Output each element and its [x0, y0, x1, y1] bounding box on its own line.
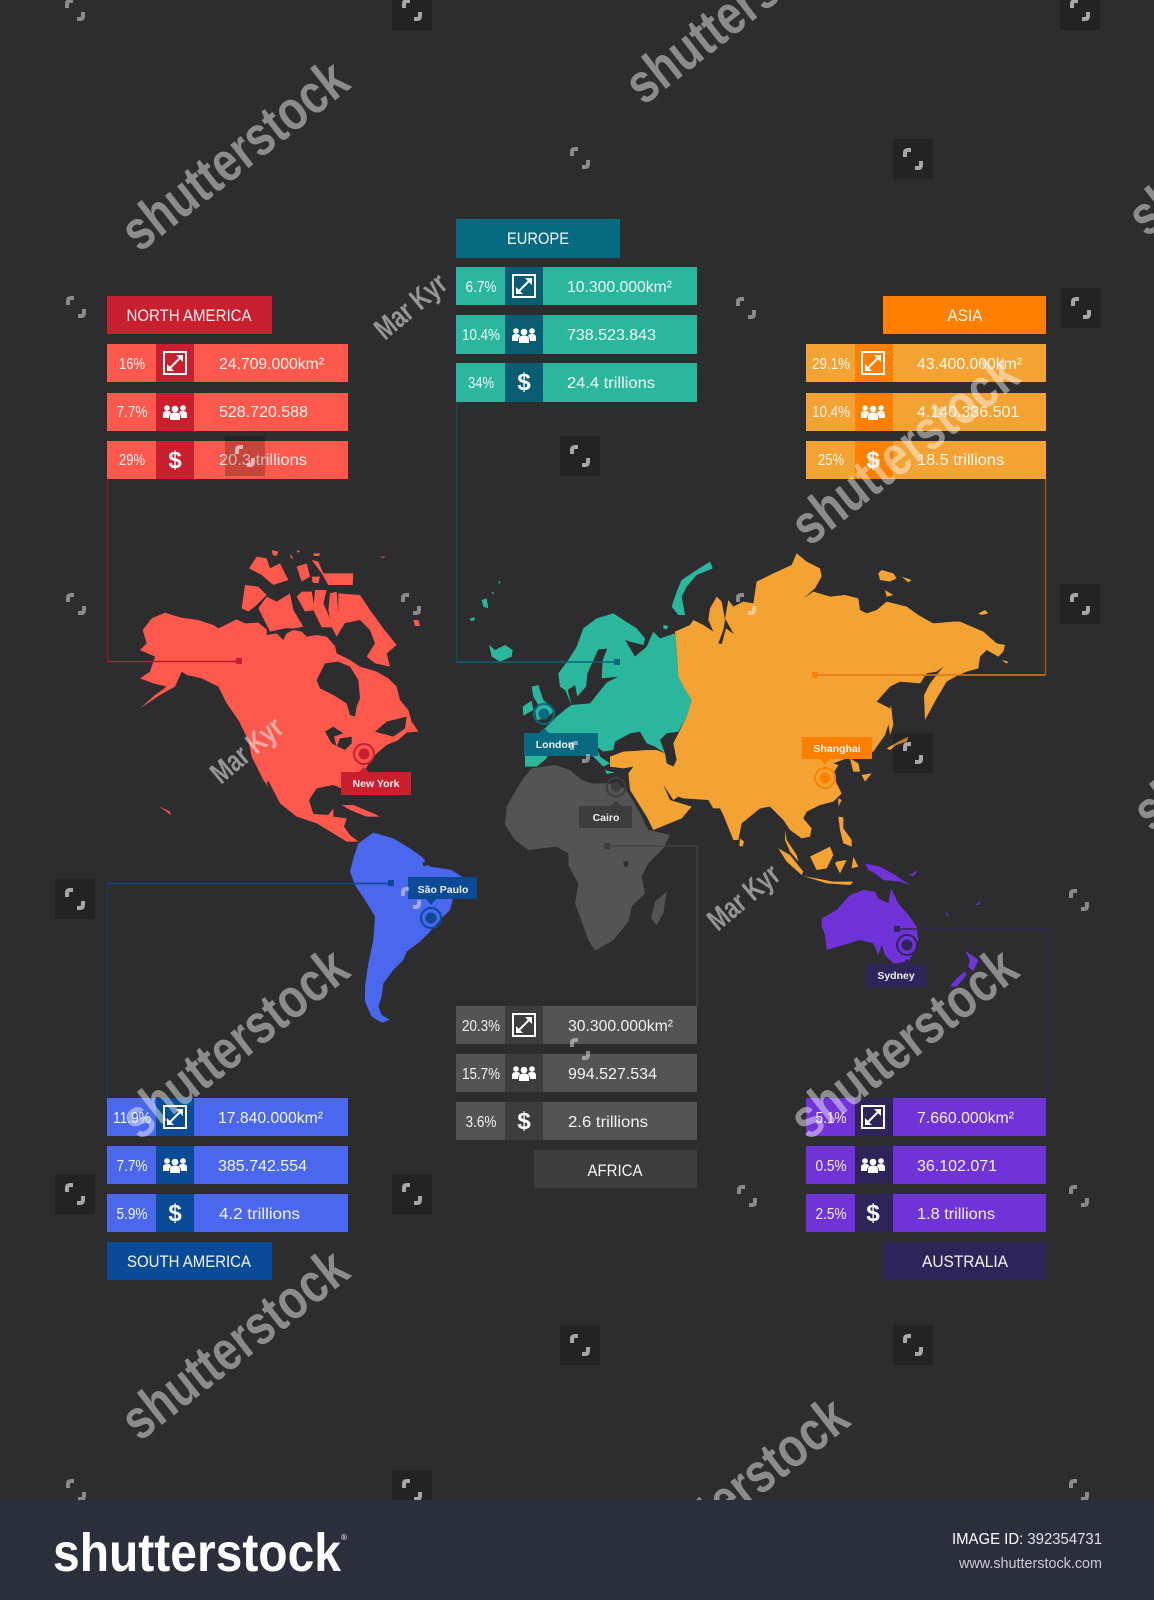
city pin: London: London	[536, 739, 574, 751]
city pin: New York	[341, 744, 411, 795]
row: area	[456, 267, 697, 305]
row: gdp: $	[866, 1200, 880, 1227]
row: area	[107, 344, 348, 382]
row: area: 43.400.000km²	[917, 356, 1023, 373]
row: gdp: 5.9%	[116, 1206, 148, 1223]
europe	[470, 562, 713, 774]
heading: asia: ASIA	[948, 306, 983, 325]
row: gdp: 25%	[818, 452, 844, 469]
row: area: 6.7%	[466, 279, 496, 296]
row: population	[456, 315, 697, 354]
row: population: 4.140.336.501	[917, 404, 1019, 421]
node: north america	[236, 658, 242, 664]
connector lines	[108, 402, 1046, 1098]
panel: africa	[456, 1006, 697, 1188]
row: population: 10.4%	[462, 327, 500, 344]
node: asia	[812, 672, 818, 678]
row: gdp: $	[168, 1200, 182, 1227]
row: area	[107, 1098, 348, 1136]
footer image id: IMAGE ID: 392354731	[952, 1531, 1102, 1548]
panel: north america	[107, 296, 348, 479]
asia	[610, 553, 1008, 840]
city pin: London	[524, 704, 598, 756]
watermark: author name	[204, 267, 787, 937]
row: gdp: 34%	[468, 375, 494, 392]
row: population: 738.523.843	[567, 327, 656, 344]
north america	[140, 550, 420, 842]
watermark: author name: Mar Kyr	[204, 711, 290, 790]
footer url: www.shutterstock.com	[958, 1555, 1102, 1572]
row: gdp: $	[866, 447, 880, 474]
row: area: 29.1%	[812, 356, 850, 373]
row: gdp: 29%	[119, 452, 145, 469]
watermark: stock brand text: shutterstock	[777, 934, 1029, 1151]
row: gdp: 24.4 trillions	[567, 375, 655, 392]
heading: europe	[456, 219, 620, 258]
row: population: 36.102.071	[917, 1158, 997, 1175]
row: population: 7.7%	[116, 404, 148, 421]
row: area	[456, 1006, 697, 1044]
city pin: Sydney	[866, 935, 926, 987]
row: gdp: $	[517, 1108, 531, 1135]
heading: australia: AUSTRALIA	[922, 1252, 1009, 1271]
row: population	[107, 1146, 348, 1184]
heading: africa: AFRICA	[588, 1161, 643, 1180]
panel: europe	[456, 219, 697, 402]
heading: south america: SOUTH AMERICA	[127, 1252, 252, 1271]
node: africa	[604, 843, 610, 849]
row: population: 0.5%	[816, 1158, 846, 1175]
row: gdp: 20.3 trillions	[219, 452, 307, 469]
footer bar	[0, 1500, 1154, 1600]
world map	[140, 550, 1008, 1023]
row: population	[806, 1146, 1046, 1184]
row: gdp: 2.6 trillions	[568, 1114, 648, 1131]
row: gdp: 18.5 trillions	[917, 452, 1004, 469]
heading: europe: EUROPE	[507, 229, 569, 248]
panel: south america	[107, 1098, 348, 1280]
row: area: 20.3%	[462, 1018, 500, 1035]
heading: australia	[883, 1242, 1046, 1280]
row: area: 16%	[119, 356, 145, 373]
row: gdp	[456, 1102, 697, 1140]
row: area: 30.300.000km²	[568, 1018, 674, 1035]
row: gdp	[456, 363, 697, 402]
row: area: 24.709.000km²	[219, 356, 325, 373]
southeast asia islands	[739, 798, 858, 885]
row: area: 5.1%	[816, 1110, 846, 1127]
row: gdp: 3.6%	[466, 1114, 496, 1131]
city pin: New York: New York	[353, 778, 400, 790]
footer logo: shutterstock	[53, 1523, 342, 1583]
city pin: São Paulo: São Paulo	[418, 884, 468, 896]
row: gdp: 1.8 trillions	[917, 1206, 995, 1223]
node: australia	[894, 926, 900, 932]
row: gdp	[107, 441, 348, 479]
row: area: 11.9%	[113, 1110, 151, 1127]
node: europe	[614, 659, 620, 665]
row: area: 17.840.000km²	[218, 1110, 324, 1127]
row: population: 528.720.588	[219, 404, 308, 421]
footer registered mark: ®	[341, 1533, 347, 1542]
row: population: 7.7%	[116, 1158, 148, 1175]
city pin: Shanghai: Shanghai	[813, 743, 861, 755]
row: area: 7.660.000km²	[917, 1110, 1015, 1127]
watermark: stock brand text: shutterstock	[108, 934, 360, 1151]
row: population: 385.742.554	[218, 1158, 307, 1175]
heading: north america	[107, 296, 272, 334]
heading: north america: NORTH AMERICA	[126, 306, 252, 325]
row: population: 15.7%	[462, 1066, 500, 1083]
row: population	[806, 393, 1046, 431]
row: gdp	[806, 1194, 1046, 1232]
row: area	[806, 1098, 1046, 1136]
heading: africa	[534, 1150, 697, 1188]
watermark: stock brand text: shutterstock	[108, 1235, 360, 1452]
watermark: stock brand text: shutterstock	[608, 1383, 860, 1600]
watermark: author name: Mar Kyr	[701, 858, 787, 937]
watermark: author name: Mar Kyr	[368, 267, 454, 346]
row: population: 994.527.534	[568, 1066, 657, 1083]
city pin: Sydney: Sydney	[877, 970, 915, 982]
row: gdp: $	[517, 369, 531, 396]
row: population: 10.4%	[812, 404, 850, 421]
row: gdp: 4.2 trillions	[219, 1206, 300, 1223]
south america	[350, 833, 462, 1023]
city pin: São Paulo	[408, 877, 477, 928]
row: gdp	[107, 1194, 348, 1232]
row: population	[456, 1054, 697, 1092]
city pin: Cairo	[579, 778, 632, 828]
watermark: stock brand text: shutterstock	[108, 46, 360, 263]
australia and oceania	[822, 863, 982, 987]
city pin: Shanghai	[802, 737, 872, 788]
row: area	[806, 344, 1046, 382]
node: south america	[388, 880, 394, 886]
city pin: Cairo: Cairo	[593, 812, 619, 824]
row: gdp: 2.5%	[816, 1206, 846, 1223]
row: gdp: $	[168, 447, 182, 474]
panel: asia	[806, 296, 1046, 479]
heading: asia	[883, 296, 1046, 334]
row: population	[107, 393, 348, 431]
panel: australia	[806, 1098, 1046, 1280]
row: area: 10.300.000km²	[567, 279, 673, 296]
watermark: stock brand text: shutterstock	[778, 340, 1030, 557]
row: gdp	[806, 441, 1046, 479]
africa	[505, 765, 670, 951]
heading: south america	[107, 1242, 272, 1280]
